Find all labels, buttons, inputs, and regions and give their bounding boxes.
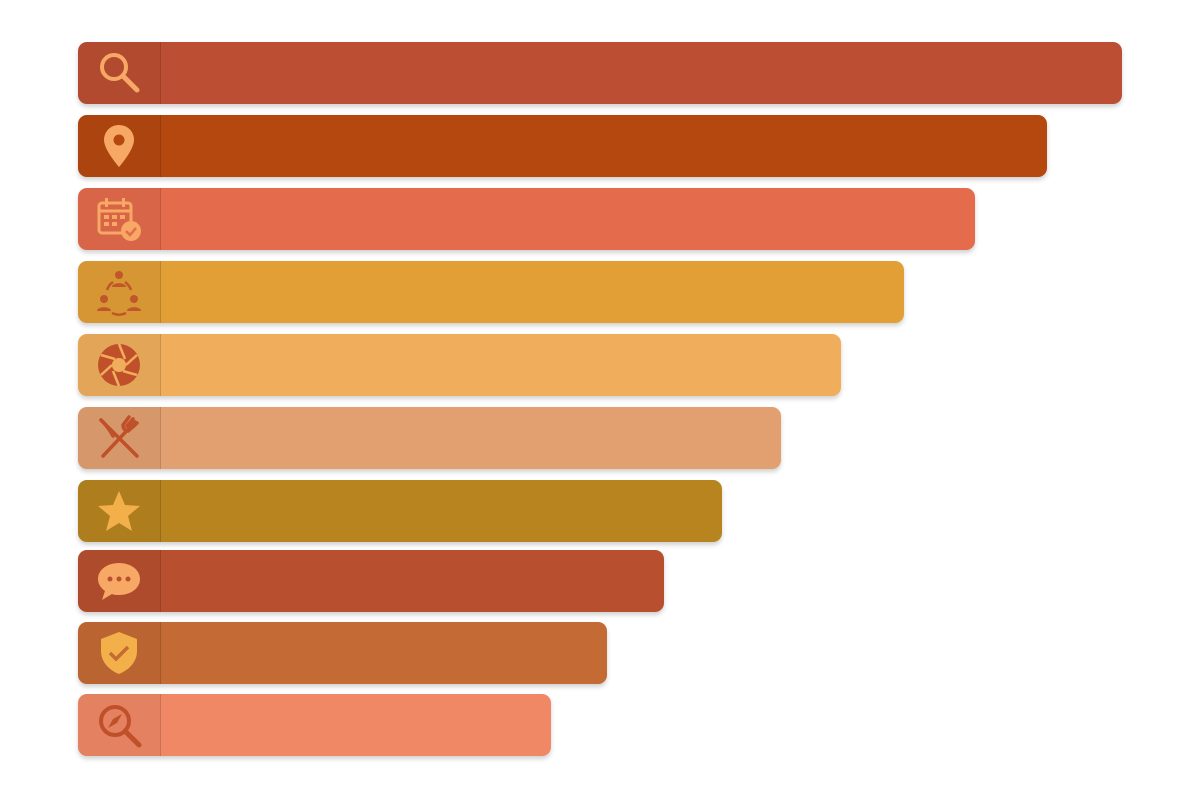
icon: star <box>98 491 140 531</box>
icon: compass magnifier <box>99 705 142 748</box>
icon: magnifier <box>100 53 140 92</box>
icon: speech bubble <box>98 563 140 600</box>
bar 6: dining <box>78 407 781 469</box>
bar 5: aperture <box>78 334 841 396</box>
icon: shield check <box>101 632 137 674</box>
icon: map pin <box>104 125 134 167</box>
icon: people circle <box>97 271 141 316</box>
bar 3: calendar <box>78 188 975 250</box>
icon: calendar check <box>98 198 141 241</box>
bar 10: explore <box>78 694 551 756</box>
bar 2: location <box>78 115 1047 177</box>
bar 9: shield <box>78 622 607 684</box>
bar 4: community <box>78 261 904 323</box>
bar chart <box>76 42 1124 761</box>
bar 1: search <box>78 42 1122 104</box>
bar 7: star <box>78 480 722 542</box>
icon: fork and knife <box>99 415 139 458</box>
bar 8: chat <box>78 550 664 612</box>
icon: camera aperture <box>98 344 140 386</box>
